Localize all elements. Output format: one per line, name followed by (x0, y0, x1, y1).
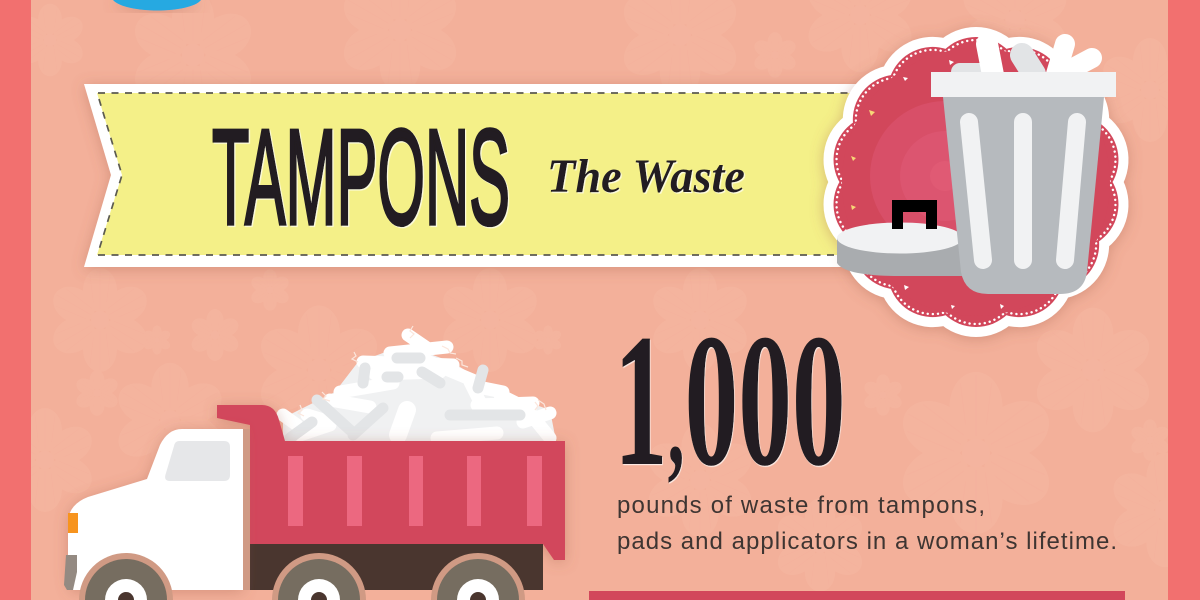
title ribbon banner (84, 84, 880, 267)
subtitle: The Waste: The Waste (547, 150, 745, 203)
cab window (165, 441, 230, 481)
bumper (64, 555, 77, 590)
dump bed (217, 405, 565, 560)
can stripes (969, 122, 1077, 260)
icon: dump truck full of tampons (64, 326, 565, 600)
chassis (250, 544, 543, 590)
tampon pile (283, 326, 556, 441)
statistic description: pounds of waste from tampons, (617, 492, 985, 519)
next section red bar (589, 591, 1125, 600)
can body (943, 97, 1104, 294)
cab (68, 429, 243, 590)
can rim (931, 72, 1116, 97)
headlight (68, 513, 78, 533)
lid on the ground (837, 200, 965, 276)
infographic canvas: TAMPONS (212, 101, 510, 253)
blue circle at top edge (113, 0, 201, 10)
statistic: 1,000: 1,000 (614, 295, 846, 506)
icon: lace doily badge (825, 32, 1127, 332)
statistic description: pads and applicators in a woman’s lifetime. (617, 528, 1117, 555)
icon: trash can with lid (837, 44, 1116, 294)
trash contents (960, 44, 1092, 75)
wheels (79, 553, 525, 600)
bed panel stripes (288, 456, 542, 526)
statistic description (617, 492, 1117, 555)
